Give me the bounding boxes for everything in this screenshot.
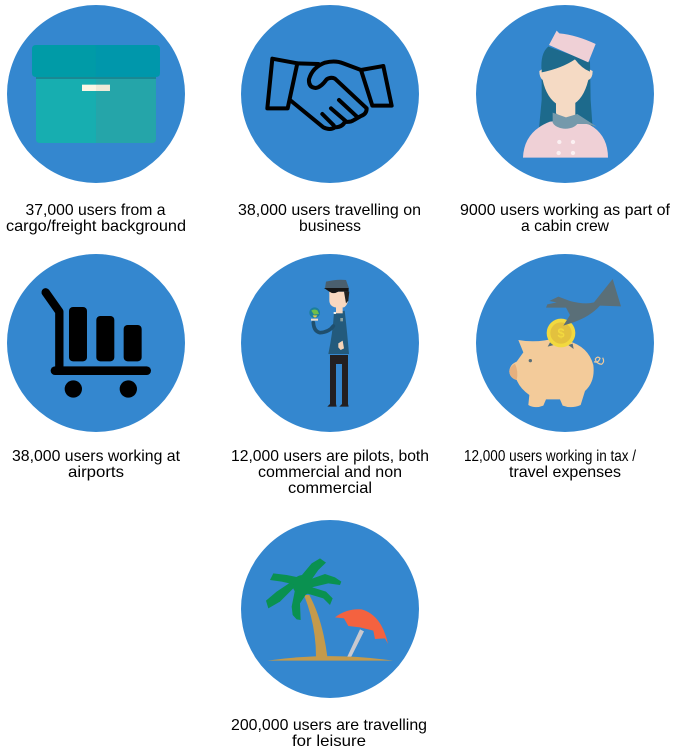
- circle: leisure: [241, 520, 419, 698]
- icon: luggage trolley: [46, 292, 147, 398]
- caption: cabin crew: 9000 users working as part of: [460, 202, 671, 219]
- caption: cabin crew: [460, 202, 671, 235]
- caption: airports: 38,000 users working at: [12, 448, 181, 465]
- caption: pilots: commercial and non: [258, 464, 402, 481]
- caption: cargo: [6, 202, 186, 235]
- panel: leisure users: [231, 520, 427, 750]
- icon: flight attendant: [523, 31, 608, 158]
- icon: pilot figure: [309, 280, 349, 407]
- caption: pilots: 12,000 users are pilots, both: [231, 448, 429, 465]
- circle: business: [241, 5, 419, 183]
- caption: pilots: commercial: [288, 480, 372, 497]
- caption: pilots: [231, 448, 429, 497]
- caption: cargo: cargo/freight background: [6, 218, 186, 235]
- icon: palm tree and parasol: [266, 558, 393, 661]
- circle: airports: [7, 254, 185, 432]
- caption: leisure: 200,000 users are travelling: [231, 717, 427, 734]
- panel: tax and expenses users: [464, 254, 654, 481]
- icon: piggy bank with coin: [509, 279, 621, 407]
- caption: business: [238, 202, 421, 235]
- circle: pilots: [241, 254, 419, 432]
- caption: tax: 12,000 users working in tax /: [464, 448, 636, 465]
- panel: cabin crew users: [460, 5, 671, 235]
- caption: business: 38,000 users travelling on: [238, 202, 421, 219]
- icon: handshake: [267, 59, 392, 129]
- caption: cargo: 37,000 users from a: [26, 202, 166, 219]
- caption: leisure: [231, 717, 427, 750]
- panel: pilot users: [231, 254, 429, 497]
- caption: tax: [464, 448, 636, 481]
- icon: cardboard box: [32, 45, 160, 143]
- circle: cargo: [7, 5, 185, 183]
- caption: tax: travel expenses: [509, 464, 621, 481]
- caption: airports: airports: [68, 464, 124, 481]
- circle: cabin crew: [476, 5, 654, 183]
- panel: cargo users: [6, 5, 186, 235]
- caption: cabin crew: a cabin crew: [521, 218, 609, 235]
- panel: business users: [238, 5, 421, 235]
- caption: leisure: for leisure: [292, 733, 366, 750]
- caption: business: business: [299, 218, 361, 235]
- icon: piggy bank with coin: $: [557, 327, 565, 341]
- circle: tax: [476, 254, 654, 432]
- caption: airports: [12, 448, 181, 481]
- panel: airport users: [7, 254, 185, 481]
